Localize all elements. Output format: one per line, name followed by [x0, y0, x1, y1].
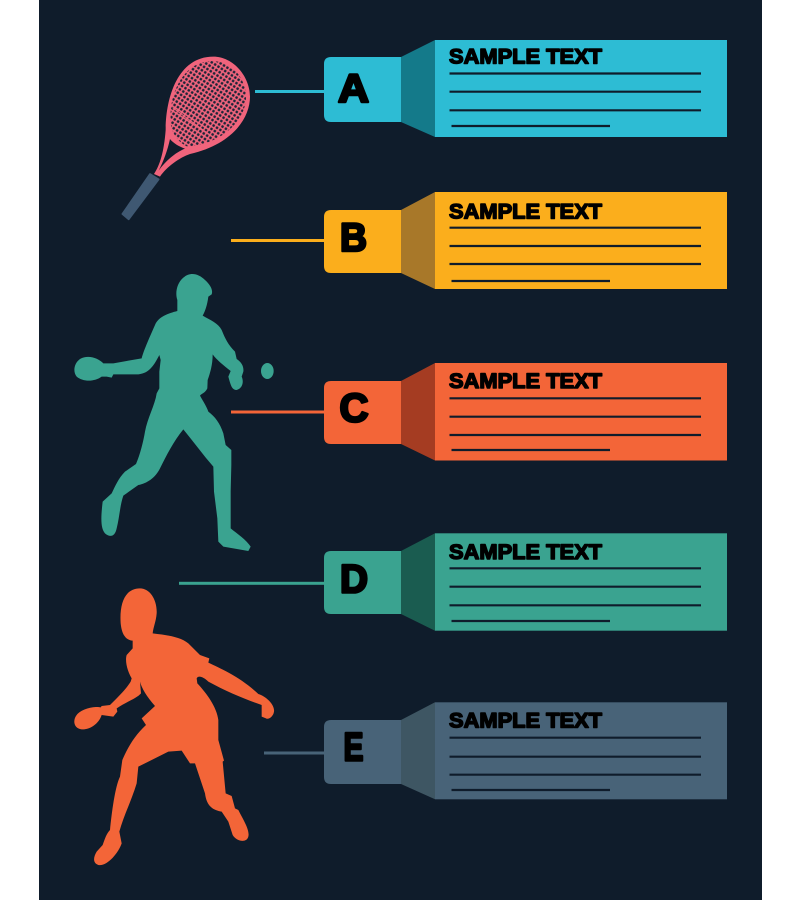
letter D: D [340, 558, 368, 602]
connector C [231, 410, 325, 414]
tab C [324, 381, 402, 444]
tab B [324, 210, 402, 273]
panel: B [231, 192, 727, 289]
box A [435, 40, 727, 137]
box C [435, 363, 727, 460]
icon: ball [261, 363, 274, 379]
fold B [401, 192, 435, 289]
icon: table tennis player, orange [74, 588, 274, 865]
fold D [401, 533, 435, 631]
panel: E [264, 702, 727, 799]
text lines D [450, 568, 701, 621]
connector B [231, 239, 325, 242]
box B [435, 192, 727, 289]
panel: D [179, 533, 727, 631]
fold C [401, 363, 435, 460]
panel: C [231, 363, 727, 460]
text lines B [450, 228, 701, 281]
fold A [401, 40, 435, 137]
heading A: SAMPLE TEXT [449, 44, 602, 68]
box D [435, 533, 727, 631]
letter E: E [344, 726, 364, 770]
connector A [255, 90, 325, 93]
heading B: SAMPLE TEXT [449, 199, 602, 223]
tab E [324, 720, 402, 784]
heading D: SAMPLE TEXT [449, 540, 602, 564]
letter A: A [338, 67, 369, 111]
connector E [264, 752, 325, 754]
fold E [401, 702, 435, 799]
text lines C [450, 398, 701, 450]
icon: tennis racket [122, 57, 250, 219]
text lines A [450, 74, 701, 126]
heading E: SAMPLE TEXT [449, 709, 602, 733]
letter B: B [340, 216, 367, 260]
box E [435, 702, 727, 799]
connector D [179, 582, 325, 585]
letter C: C [340, 386, 368, 430]
text lines E [450, 738, 701, 790]
tab D [324, 551, 402, 614]
panel: A [255, 40, 727, 137]
heading C: SAMPLE TEXT [449, 369, 602, 393]
icon: table tennis player, teal [74, 274, 274, 551]
tab A [324, 57, 402, 122]
